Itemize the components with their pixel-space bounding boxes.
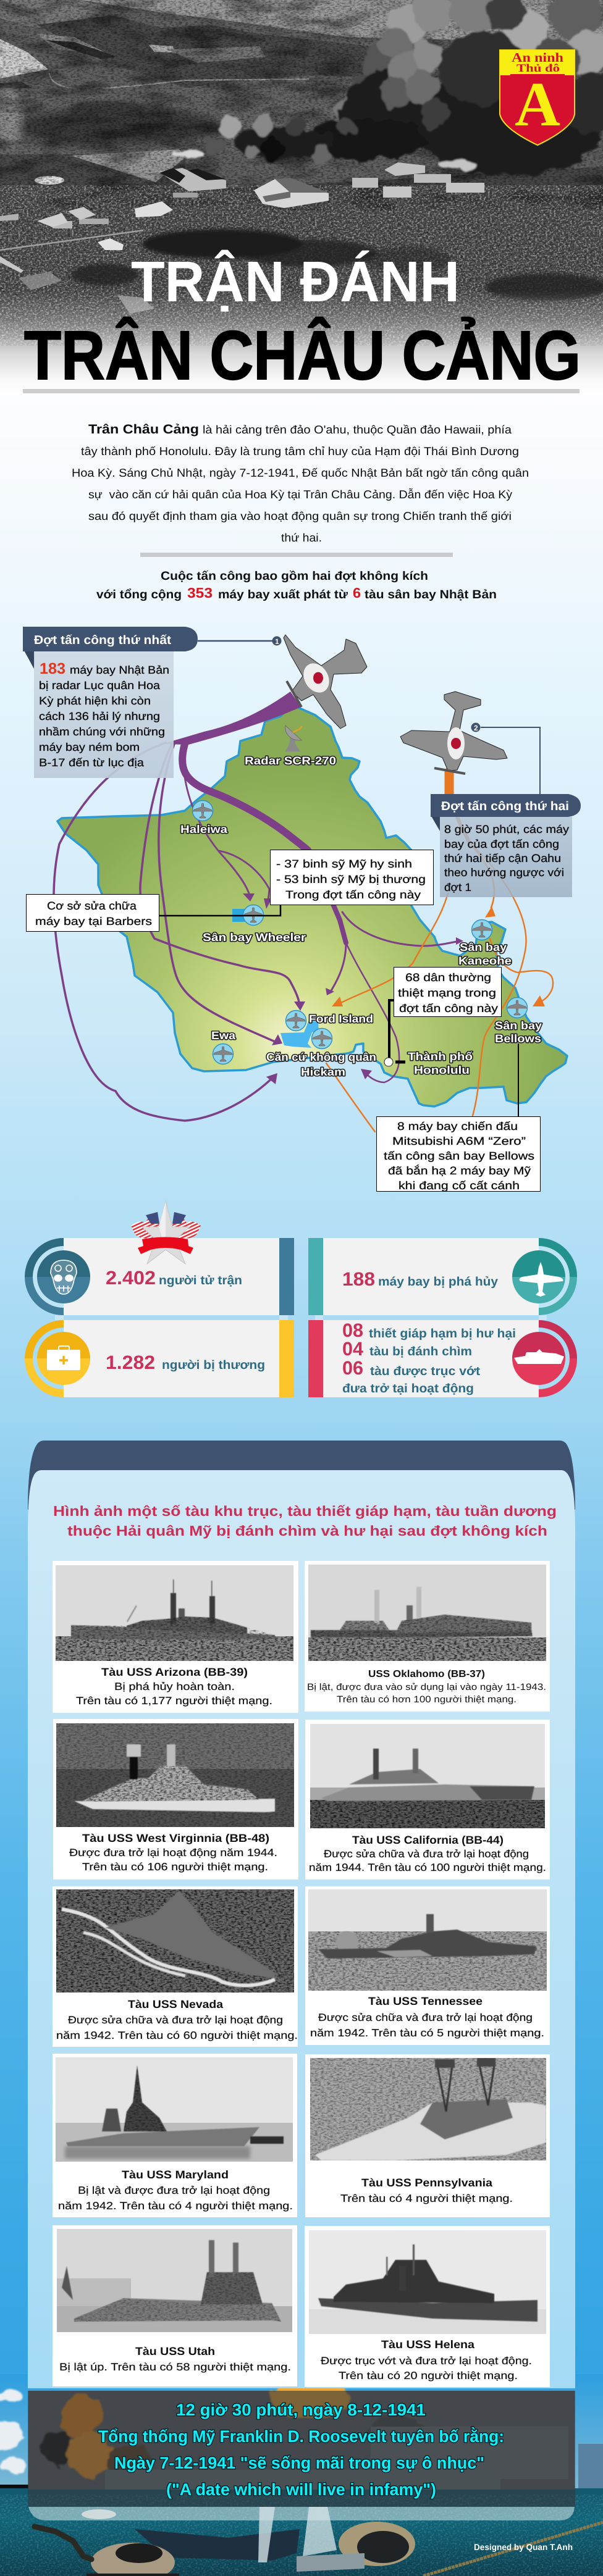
attack summary heading: Cuộc tấn công bao gồm hai đợt không kích bbox=[161, 569, 428, 583]
callout: civilians: đợt tấn công này bbox=[399, 1002, 498, 1014]
panel heading: thuộc Hải quân Mỹ bị đánh chìm và hư hại sau đợt không kích bbox=[67, 1523, 547, 1539]
ship card: Nevada: năm 1942. Trên tàu có 60 người thiệt mạng. bbox=[56, 2030, 298, 2041]
intro text block: thứ hai. bbox=[281, 531, 322, 544]
connector: plane 1 number bbox=[198, 636, 282, 646]
callout: Zero fighters at Bellows: tấn công sân bay Bellows bbox=[384, 1150, 534, 1162]
attack summary heading bbox=[96, 569, 497, 601]
attack summary heading: với tổng cộng bbox=[96, 588, 182, 601]
bottom photo: attack on the harbor bbox=[0, 2374, 603, 2576]
plane 1 bbox=[284, 635, 367, 729]
stat card: planes destroyed: máy bay bị phá hủy bbox=[378, 1275, 499, 1289]
callout: Barbers repair base bbox=[26, 894, 159, 931]
icon: skull bbox=[51, 1260, 77, 1294]
map place labels: Haleiwa bbox=[180, 823, 228, 835]
ship card: West Virginia bbox=[53, 1719, 298, 1880]
ship card: Helena: Được trục vớt và đưa trở lại hoạt động. bbox=[321, 2355, 532, 2367]
title: TRẬN ĐÁNH bbox=[131, 249, 460, 314]
map place labels: Ewa bbox=[211, 1029, 236, 1042]
callout: first wave: máy bay Nhật Bản bbox=[70, 664, 169, 676]
closing quote panel: 12 giờ 30 phút, ngày 8-12-1941 bbox=[176, 2401, 426, 2419]
map place labels: Ford Island bbox=[309, 1013, 373, 1025]
callout: Barbers repair base: Cơ sở sửa chữa bbox=[47, 900, 137, 912]
stat card: ships: 06 bbox=[342, 1357, 363, 1379]
ship card: Pennsylvania: Trên tàu có 4 người thiệt mạng. bbox=[340, 2193, 513, 2204]
callout: first wave: bị radar Lục quân Hoa bbox=[39, 679, 161, 692]
ship card: California bbox=[305, 1720, 550, 1880]
icon: medical kit bbox=[47, 1346, 80, 1370]
stat card: killed: người tử trận bbox=[159, 1274, 242, 1287]
ship card: Tennessee: Được sửa chữa và đưa trở lại hoạt động bbox=[318, 2012, 533, 2023]
callout: civilians: 68 dân thường bbox=[405, 971, 491, 984]
ship card: California: Tàu USS California (BB-44) bbox=[352, 1834, 504, 1846]
smoke plume bbox=[173, 0, 603, 176]
connector lines bbox=[159, 905, 518, 1116]
ship card: Maryland: năm 1942. Trên tàu có 4 người thiệt mạng. bbox=[58, 2200, 293, 2212]
ship card: Tennessee: Tàu USS Tennessee bbox=[368, 1995, 483, 2007]
callout: first wave: nhầm chúng với những bbox=[39, 726, 165, 738]
trees bbox=[71, 229, 603, 301]
stat card: ships: thiết giáp hạm bị hư hại bbox=[369, 1327, 516, 1340]
header photo: Hickam airfield burning bbox=[0, 0, 603, 395]
connector: plane 1 number: 1 bbox=[275, 637, 279, 646]
ship card: Maryland bbox=[53, 2054, 297, 2217]
ship photo bbox=[56, 1889, 294, 1993]
map place labels: Thành phố bbox=[408, 1050, 473, 1063]
callout: first wave: 183 bbox=[40, 660, 65, 677]
stats panel bbox=[25, 1238, 577, 1397]
callout: second wave: thứ hai tiếp cận Oahu bbox=[444, 852, 561, 864]
closing quote panel: Tổng thống Mỹ Franklin D. Roosevelt tuyên bố rằng: bbox=[98, 2427, 504, 2446]
icon: plane bbox=[520, 1262, 563, 1297]
island of Oahu bbox=[57, 707, 567, 1106]
ship card: California: năm 1944. Trên tàu có 100 người thiệt mạng. bbox=[309, 1862, 546, 1873]
radar icon bbox=[285, 726, 302, 751]
intro text block: Hoa Kỳ. Sáng Chủ Nhật, ngày 7-12-1941, Đế quốc Nhật Bản bất ngờ tấn công quân bbox=[72, 466, 529, 479]
callout: casualties first wave bbox=[271, 850, 434, 905]
ship card: Nevada bbox=[53, 1886, 298, 2047]
ship card: Pennsylvania bbox=[305, 2054, 550, 2217]
callout: civilians bbox=[394, 967, 502, 1016]
icon: warship bbox=[514, 1349, 564, 1364]
ship card: Utah bbox=[53, 2225, 297, 2386]
intro text block: là hải cảng trên đảo O'ahu, thuộc Quần đảo Hawaii, phía bbox=[203, 423, 512, 436]
callout: second wave: Đợt tấn công thứ hai bbox=[441, 800, 569, 813]
callout: Zero fighters at Bellows: khi đang cố cất cánh bbox=[398, 1179, 520, 1192]
intro text block: tây thành phố Honolulu. Đây là trung tâm chỉ huy của Hạm đội Thái Bình Dương bbox=[81, 445, 519, 458]
logo: An ninh Thu do shield bbox=[500, 50, 575, 145]
connector: plane 2 number: 2 bbox=[474, 724, 478, 732]
panel: ships section bbox=[28, 1441, 575, 2520]
ship card: West Virginia: Trên tàu có 106 người thiệt mạng. bbox=[82, 1861, 268, 1873]
ship card: Oklahoma: Bị lật, được đưa vào sử dụng lại vào ngày 11-1943. bbox=[307, 1682, 546, 1692]
Honolulu marker bbox=[384, 1058, 393, 1066]
ship photo bbox=[56, 1723, 294, 1827]
second wave orange routes bbox=[326, 772, 553, 1132]
ship card: Tennessee bbox=[305, 1886, 550, 2045]
stat card: wounded: 1.282 bbox=[106, 1352, 155, 1373]
ship photo bbox=[57, 2229, 292, 2332]
intro text block: sự vào căn cứ hải quân của Hoa Kỳ tại Trân Châu Cảng. Dẫn đến việc Hoa Kỳ bbox=[88, 488, 513, 501]
callout: Barbers repair base: máy bay tại Barbers bbox=[35, 915, 152, 927]
callout: second wave: bay của đợt tấn công bbox=[444, 838, 559, 850]
bottom scene: boats and rope bbox=[35, 2507, 603, 2576]
callout: Zero fighters at Bellows: Mitsubishi A6M “Zero” bbox=[392, 1135, 526, 1147]
base buildings bbox=[0, 162, 484, 314]
ship card: Oklahoma bbox=[305, 1561, 550, 1712]
closing quote panel: ("A date which will live in infamy") bbox=[166, 2480, 436, 2499]
callout: first wave: máy bay ném bom bbox=[39, 741, 140, 753]
ship card: Arizona: Trên tàu có 1,177 người thiệt mạng. bbox=[76, 1695, 272, 1707]
callout: casualties first wave: Trong đợt tấn công này bbox=[285, 889, 421, 901]
ship card: Utah: Tàu USS Utah bbox=[135, 2345, 215, 2357]
ship card: Nevada: Được sửa chữa và đưa trở lại hoạt động bbox=[68, 2014, 283, 2026]
ship card: Arizona: Bị phá hủy hoàn toàn. bbox=[114, 1681, 235, 1692]
intro text block: sau đó quyết định tham gia vào hoạt động quân sự trong Chiến tranh thế giới bbox=[88, 509, 512, 522]
ship photo bbox=[310, 2058, 546, 2160]
ship photo bbox=[56, 1565, 293, 1661]
map place labels: Sân bay bbox=[460, 941, 507, 953]
map place labels: Hickam bbox=[301, 1066, 345, 1078]
intro text block: Trân Châu Cảng bbox=[88, 422, 199, 437]
map place labels: Bellows bbox=[495, 1032, 541, 1045]
stat card: ships: 08 bbox=[342, 1319, 363, 1341]
map place labels: Radar SCR-270 bbox=[245, 755, 336, 767]
ship card: West Virginia: Tàu USS West Virginnia (BB-48) bbox=[82, 1832, 269, 1844]
callout: casualties first wave: - 53 binh sỹ Mỹ bị thương bbox=[276, 873, 426, 885]
logo: An ninh Thu do shield: Thủ đô bbox=[517, 62, 560, 74]
attack summary heading: tàu sân bay Nhật Bản bbox=[365, 588, 497, 601]
callout: first wave: cách 136 hải lý nhưng bbox=[39, 710, 160, 722]
attack summary heading: 353 bbox=[187, 585, 213, 601]
stat card: ships: 04 bbox=[342, 1338, 364, 1360]
callout: first wave bbox=[23, 627, 198, 778]
ship photo bbox=[309, 2230, 546, 2334]
callout: Zero fighters at Bellows: 8 máy bay chiến đấu bbox=[397, 1120, 518, 1132]
callout: second wave: theo hướng ngược với bbox=[444, 866, 564, 879]
stat card: wounded bbox=[25, 1320, 294, 1397]
ship photo bbox=[308, 1889, 547, 1991]
ship card: Arizona: Tàu USS Arizona (BB-39) bbox=[101, 1666, 248, 1678]
callout: Zero fighters at Bellows bbox=[377, 1116, 540, 1192]
ship card: Oklahoma: Trên tàu có hơn 100 người thiệt mạng. bbox=[337, 1694, 517, 1705]
callout: second wave bbox=[431, 794, 581, 897]
connector: plane 2 number bbox=[471, 722, 540, 794]
callout: civilians: thiệt mạng trong bbox=[398, 987, 496, 999]
stat card: ships bbox=[308, 1319, 577, 1397]
intro text block bbox=[72, 422, 529, 544]
ship card: Utah: Bị lật úp. Trên tàu có 58 người thiệt mạng. bbox=[59, 2361, 291, 2373]
first wave purple routes bbox=[54, 692, 463, 1121]
ship card: Helena: Tàu USS Helena bbox=[381, 2338, 475, 2351]
callout: second wave: đợt 1 bbox=[444, 881, 471, 893]
attack summary heading: máy bay xuất phát từ bbox=[218, 588, 348, 601]
stat card: planes destroyed: 188 bbox=[342, 1268, 375, 1290]
connector strips bbox=[55, 1315, 547, 1320]
map: Oahu attack routes bbox=[54, 692, 567, 1132]
ship photo bbox=[310, 1724, 545, 1828]
ship card: Nevada: Tàu USS Nevada bbox=[128, 1998, 224, 2010]
stat card: ships: tàu bị đánh chìm bbox=[369, 1345, 472, 1358]
ship photo bbox=[56, 2057, 293, 2162]
stat card: killed: 2.402 bbox=[106, 1267, 156, 1289]
ship card: Arizona bbox=[53, 1561, 298, 1713]
stat card: ships: đưa trở tại hoạt động bbox=[342, 1382, 474, 1395]
panel heading bbox=[53, 1503, 557, 1539]
plane 2 bbox=[400, 692, 507, 774]
callout: second wave: 8 giờ 50 phút, các máy bbox=[444, 823, 569, 835]
attack summary heading: 6 bbox=[353, 585, 361, 601]
ship card: Pennsylvania: Tàu USS Pennsylvania bbox=[361, 2177, 493, 2189]
stat card: ships: tàu được trục vớt bbox=[370, 1365, 480, 1378]
icon: star with flags and ribbon bbox=[131, 1201, 201, 1264]
ship photo bbox=[308, 1565, 546, 1661]
ship card: Maryland: Tàu USS Maryland bbox=[122, 2168, 229, 2181]
stat card: planes destroyed bbox=[308, 1238, 577, 1315]
callout: Zero fighters at Bellows: đã bắn hạ 2 máy bay Mỹ bbox=[388, 1165, 531, 1177]
callout: first wave: Đợt tấn công thứ nhất bbox=[34, 634, 171, 647]
ship card: West Virginia: Được đưa trở lại hoạt động năm 1944. bbox=[69, 1847, 277, 1859]
Pearl Harbor water bbox=[280, 1020, 319, 1048]
callout: first wave: B-17 đến từ lục địa bbox=[39, 756, 145, 769]
stat card: killed bbox=[25, 1238, 294, 1315]
map place labels: Sân bay bbox=[495, 1019, 542, 1032]
airfield icons bbox=[193, 800, 528, 1064]
ship card: Tennessee: năm 1942. Trên tàu có 5 người thiệt mạng. bbox=[310, 2027, 544, 2039]
map place labels: Căn cứ không quân bbox=[266, 1051, 376, 1063]
ship card: California: Được sửa chữa và đưa trở lại hoạt động bbox=[324, 1848, 529, 1860]
logo: An ninh Thu do shield: A bbox=[515, 70, 560, 140]
closing quote panel bbox=[28, 2391, 575, 2507]
stat card: wounded: người bị thương bbox=[162, 1358, 265, 1372]
callout: casualties first wave: - 37 binh sỹ Mỹ hy sinh bbox=[276, 858, 412, 870]
ship card: Maryland: Bị lật và được đưa trở lại hoạt động bbox=[78, 2185, 270, 2196]
map place labels: Kaneohe bbox=[458, 955, 512, 967]
map place labels: Honolulu bbox=[414, 1064, 470, 1076]
title bbox=[24, 249, 581, 394]
map place labels: Sân bay Wheeler bbox=[203, 931, 306, 943]
callout: first wave: Kỳ phát hiện khi còn bbox=[39, 695, 151, 707]
map place labels bbox=[180, 755, 542, 1078]
credit: Designed by Quan T.Anh bbox=[474, 2542, 573, 2552]
panel heading: Hình ảnh một số tàu khu trục, tàu thiết giáp hạm, tàu tuần dương bbox=[53, 1503, 557, 1519]
ship card: Helena bbox=[305, 2226, 550, 2387]
closing quote panel: Ngày 7-12-1941 "sẽ sống mãi trong sự ô nhục" bbox=[114, 2454, 484, 2472]
ship card: Oklahoma: USS Oklahomo (BB-37) bbox=[368, 1669, 485, 1679]
ship card: Helena: Trên tàu có 20 người thiệt mạng. bbox=[339, 2370, 518, 2382]
logo: An ninh Thu do shield: An ninh bbox=[512, 50, 563, 65]
